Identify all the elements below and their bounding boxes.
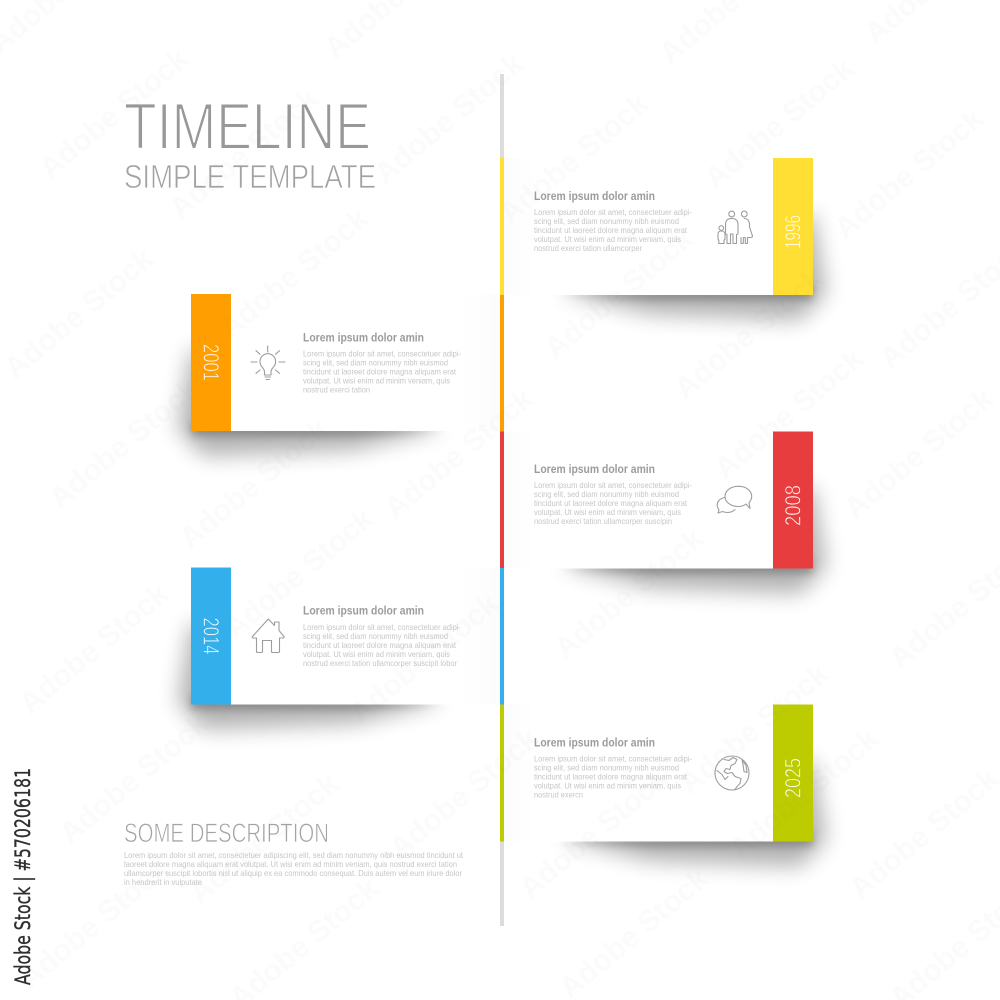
year label: 2008 (780, 485, 806, 526)
card shadow (560, 486, 826, 594)
card body text: nostrud exerci tation ullamcorper (534, 243, 642, 253)
card body text: Lorem ipsum dolor sit amet, consectetuer adipi- (303, 348, 461, 358)
watermark pattern: Adobe Stock (838, 382, 1000, 525)
watermark pattern: Adobe Stock (13, 852, 175, 995)
year tab (773, 158, 813, 295)
card body text: tincidunt ut laoreet dolore magna aliquam erat (303, 640, 457, 650)
watermark pattern: Adobe Stock (668, 262, 830, 405)
year tab (191, 294, 231, 431)
card body text: nostrud exerci tation (303, 384, 370, 394)
card heading: Lorem ipsum dolor amin (534, 462, 655, 476)
watermark pattern: Adobe Stock (33, 42, 195, 185)
card body text: scing elit, sed diam nonummy nibh euismod (534, 489, 679, 499)
watermark pattern: Adobe Stock (183, 767, 345, 910)
card heading: Lorem ipsum dolor amin (303, 604, 424, 618)
card body text: Lorem ipsum dolor sit amet, consectetuer adipi- (534, 480, 692, 490)
card body text: tincidunt ut laoreet dolore magna aliquam erat (534, 498, 688, 508)
watermark pattern: Adobe Stock (218, 502, 380, 645)
year label: 2001 (198, 344, 224, 381)
description text (124, 850, 464, 887)
watermark pattern: Adobe Stock (0, 242, 160, 385)
watermark pattern: Adobe Stock (173, 412, 335, 555)
watermark pattern: Adobe Stock (343, 587, 505, 730)
watermark pattern: Adobe Stock (163, 82, 325, 225)
card body text (303, 622, 461, 668)
icon: house (252, 619, 284, 652)
year tab (773, 704, 813, 842)
card: 2014 (178, 568, 500, 730)
watermark pattern: Adobe Stock (538, 222, 700, 365)
card body text: nostrud exerci tation ullamcorper suscipit lobor (303, 658, 457, 668)
card body text: volutpat. Ut wisi enim ad minim veniam, quis (534, 780, 681, 790)
card body text: tincidunt ut laoreet dolore magna aliquam erat (534, 225, 688, 235)
icon: globe (715, 756, 749, 790)
watermark pattern: Adobe Stock (828, 102, 990, 245)
card body text: scing elit, sed diam nonummy nibh euismod (303, 358, 448, 368)
card body text (534, 207, 692, 253)
description text: laoreet dolore magna aliquam erat volutpat. Ut wisi enim ad minim veniam, quis nostrud exerci tation (124, 859, 457, 869)
card shadow (178, 622, 444, 730)
year tab (773, 432, 813, 568)
card shadow (560, 760, 826, 866)
card body text (534, 480, 692, 526)
icon: light bulb (251, 346, 285, 380)
card: 2025 (504, 704, 826, 866)
subtitle: SIMPLE TEMPLATE (124, 159, 376, 196)
card body (504, 704, 774, 842)
card shadow (560, 213, 826, 320)
watermark pattern: Adobe Stock (673, 657, 835, 800)
watermark pattern: Adobe Stock (513, 762, 675, 905)
watermark pattern: Adobe Stock (368, 47, 530, 190)
description heading: SOME DESCRIPTION (124, 818, 329, 848)
card heading: Lorem ipsum dolor amin (303, 330, 424, 344)
watermark pattern: Adobe Stock (548, 522, 710, 665)
watermark pattern: Adobe Stock (698, 52, 860, 195)
card: 2008 (504, 432, 826, 594)
card body text: Lorem ipsum dolor sit amet, consectetuer adipi- (303, 622, 461, 632)
year label: 2014 (198, 618, 224, 654)
card: 1996 (504, 158, 826, 320)
card body text: nostrud exercn (534, 790, 583, 800)
central timeline bar (500, 74, 504, 926)
card body text: scing elit, sed diam nonummy nibh euismod (534, 762, 679, 772)
year tab (191, 568, 231, 704)
watermark pattern: Adobe Stock (383, 722, 545, 865)
watermark pattern: Adobe Stock (213, 202, 375, 345)
card body text: tincidunt ut laoreet dolore magna aliquam erat (534, 772, 688, 782)
description text: Lorem ipsum dolor sit amet, consectetuer adipiscing elit, sed diam nonummy nibh euismod tincidunt ut (124, 850, 464, 860)
description text: ullamcorper suscipit lobortis nisl ut aliquip ex ea commodo consequat. Duis autem vel eum iriure dolor (124, 868, 462, 878)
card body text: volutpat. Ut wisi enim ad minim veniam, quis (303, 649, 450, 659)
icon: speech bubbles (717, 486, 752, 513)
card body text: volutpat. Ut wisi enim ad minim veniam, quis (534, 507, 681, 517)
card body (230, 294, 500, 431)
watermark pattern: Adobe Stock (493, 87, 655, 230)
card heading: Lorem ipsum dolor amin (534, 736, 655, 750)
description text: in hendrerit in vulputate (124, 877, 202, 887)
card body text: scing elit, sed diam nonummy nibh euismod (303, 631, 448, 641)
watermark pattern: Adobe Stock (723, 722, 885, 865)
card body text: Lorem ipsum dolor sit amet, consectetuer adipi- (534, 207, 692, 217)
watermark pattern: Adobe Stock (378, 382, 540, 525)
card body text: scing elit, sed diam nonummy nibh euismod (534, 216, 679, 226)
card body text (534, 754, 692, 800)
card body text: volutpat. Ut wisi enim ad minim veniam, quis (534, 234, 681, 244)
card body text: tincidunt ut laoreet dolore magna aliquam erat (303, 366, 457, 376)
card body text: nostrud exerci tation ullamcorper suscipin (534, 516, 672, 526)
card heading: Lorem ipsum dolor amin (534, 189, 655, 203)
card shadow (178, 349, 444, 456)
watermark pattern: Adobe Stock (53, 707, 215, 850)
watermark pattern: Adobe Stock (708, 342, 870, 485)
card: 2001 (178, 294, 500, 456)
title: TIMELINE (124, 89, 371, 163)
year label: 1996 (780, 215, 806, 249)
card body text (303, 348, 461, 394)
card body text: Lorem ipsum dolor sit amet, consectetuer adipi- (534, 754, 692, 764)
card body text: volutpat. Ut wisi enim ad minim veniam, quis (303, 376, 450, 386)
card body (504, 158, 774, 295)
watermark pattern: Adobe Stock (43, 372, 205, 515)
year label: 2025 (780, 758, 806, 798)
stock credit label: Adobe Stock | #570206181 (11, 768, 36, 985)
icon: family (718, 211, 752, 244)
card body (504, 432, 774, 568)
card body (230, 568, 500, 704)
watermark pattern: Adobe Stock (13, 577, 175, 720)
